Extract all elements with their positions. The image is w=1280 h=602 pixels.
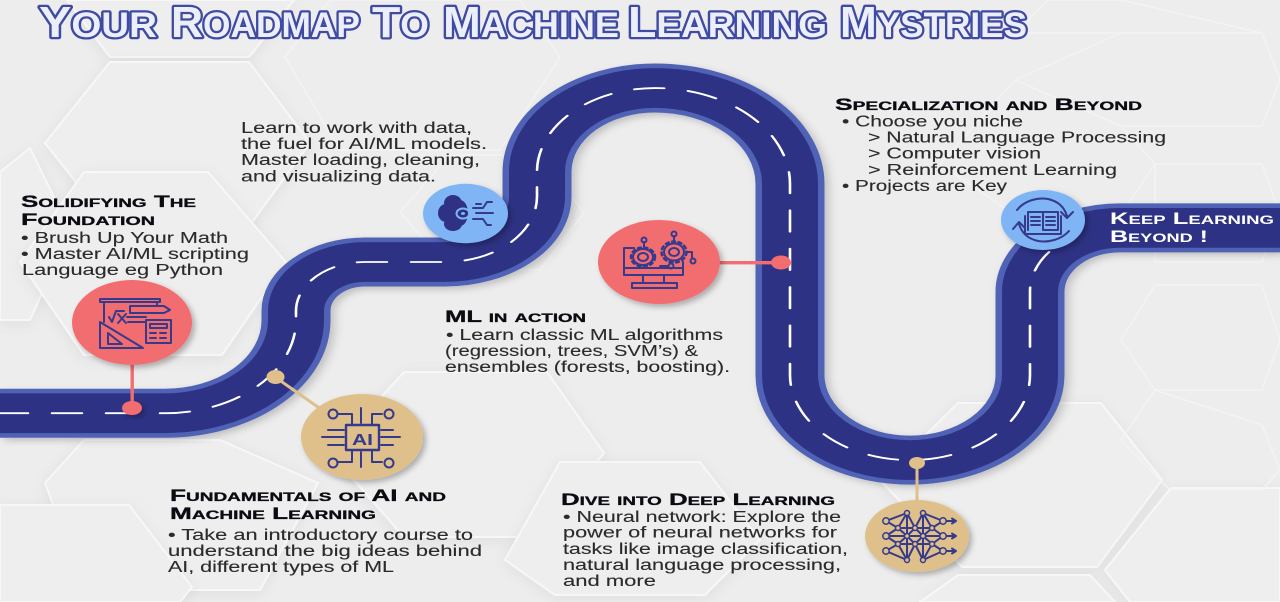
heading and text: specialization and beyond: > Natural Language Processing <box>868 130 1166 146</box>
heading and text: solidifying the foundation <box>21 193 249 279</box>
heading and text: ML in action: ML in action <box>445 308 586 326</box>
heading and text: dive into deep learning: • Neural network: Explore the <box>563 509 841 526</box>
heading and text: fundamentals of AI: Fundamentals of AI and <box>170 487 447 505</box>
heading and text: fundamentals of AI <box>168 487 482 576</box>
icon: neural network circle <box>865 500 969 572</box>
icon: AI chip circle <box>301 394 423 480</box>
icon: math tools circle <box>72 280 192 365</box>
heading and text: fundamentals of AI: understand the big ideas behind <box>168 543 482 560</box>
heading and text: dive into deep learning: tasks like image classification, <box>563 541 848 558</box>
milestone 1: solidifying the foundation <box>21 193 249 415</box>
heading and text: dive into deep learning: power of neural networks for <box>563 524 837 542</box>
milestone 2: fundamentals of AI <box>168 370 482 576</box>
heading and text: fundamentals of AI: Machine Learning <box>170 505 376 523</box>
connector: AI to road <box>266 370 325 412</box>
road end label: keep learning beyond: Beyond ! <box>1110 228 1208 246</box>
heading and text: fundamentals of AI: AI, different types of ML <box>168 559 395 576</box>
text: learn to work with data: and visualizing data. <box>241 168 436 186</box>
heading and text: solidifying the foundation: Foundation <box>21 211 155 229</box>
heading and text: solidifying the foundation: • Master AI/ML scripting <box>21 246 249 263</box>
heading and text: ML in action: ensembles (forests, boosting). <box>445 359 730 376</box>
heading and text: dive into deep learning: Dive into Deep Learning <box>561 491 835 509</box>
icon: AI chip circle: AI <box>352 432 373 449</box>
heading and text: specialization and beyond: • Choose you niche <box>842 114 1023 130</box>
heading and text: ML in action: (regression, trees, SVM’s) & <box>445 343 699 360</box>
icon: data brain gear circle <box>423 184 508 243</box>
heading and text: dive into deep learning <box>561 491 848 590</box>
heading and text: specialization and beyond: > Computer vision <box>868 146 1041 162</box>
heading and text: dive into deep learning: and more <box>563 573 656 590</box>
connector: gears to road <box>715 256 791 270</box>
icon: computer with gears circle <box>598 220 720 304</box>
heading and text: solidifying the foundation: Solidifying The <box>21 193 196 211</box>
milestone 6: specialization and beyond <box>835 96 1274 250</box>
heading and text: fundamentals of AI: • Take an introductory course to <box>168 527 473 544</box>
road end label: keep learning beyond: Keep Learning <box>1110 210 1274 228</box>
heading and text: ML in action <box>445 308 730 376</box>
heading and text: specialization and beyond: > Reinforcement Learning <box>868 162 1117 179</box>
icon: book with cycle arrows circle <box>1001 190 1085 250</box>
heading and text: specialization and beyond: • Projects are Key <box>842 178 1007 195</box>
heading and text: dive into deep learning: natural language processing, <box>563 557 841 574</box>
title <box>39 0 1027 47</box>
text: learn to work with data: the fuel for AI/ML models. <box>241 136 487 153</box>
connector: math to road <box>122 360 142 415</box>
road: winding roadmap path <box>0 88 1280 460</box>
text: learn to work with data: Master loading, cleaning, <box>241 152 480 169</box>
milestone 4: ML in action <box>445 220 791 376</box>
milestone 3: working with data <box>241 120 508 243</box>
heading and text: solidifying the foundation: Language eg Python <box>22 262 223 279</box>
text: learn to work with data: Learn to work with data, <box>241 120 472 137</box>
road end label: keep learning beyond <box>1110 210 1274 246</box>
text: learn to work with data <box>241 120 487 186</box>
heading and text: solidifying the foundation: • Brush Up Your Math <box>21 230 228 247</box>
milestone 5: deep learning <box>561 457 969 590</box>
heading and text: specialization and beyond <box>835 96 1166 195</box>
heading and text: specialization and beyond: Specialization and Beyond <box>835 96 1143 114</box>
heading and text: ML in action: • Learn classic ML algorithms <box>446 327 723 344</box>
connector: network to road <box>909 457 925 503</box>
